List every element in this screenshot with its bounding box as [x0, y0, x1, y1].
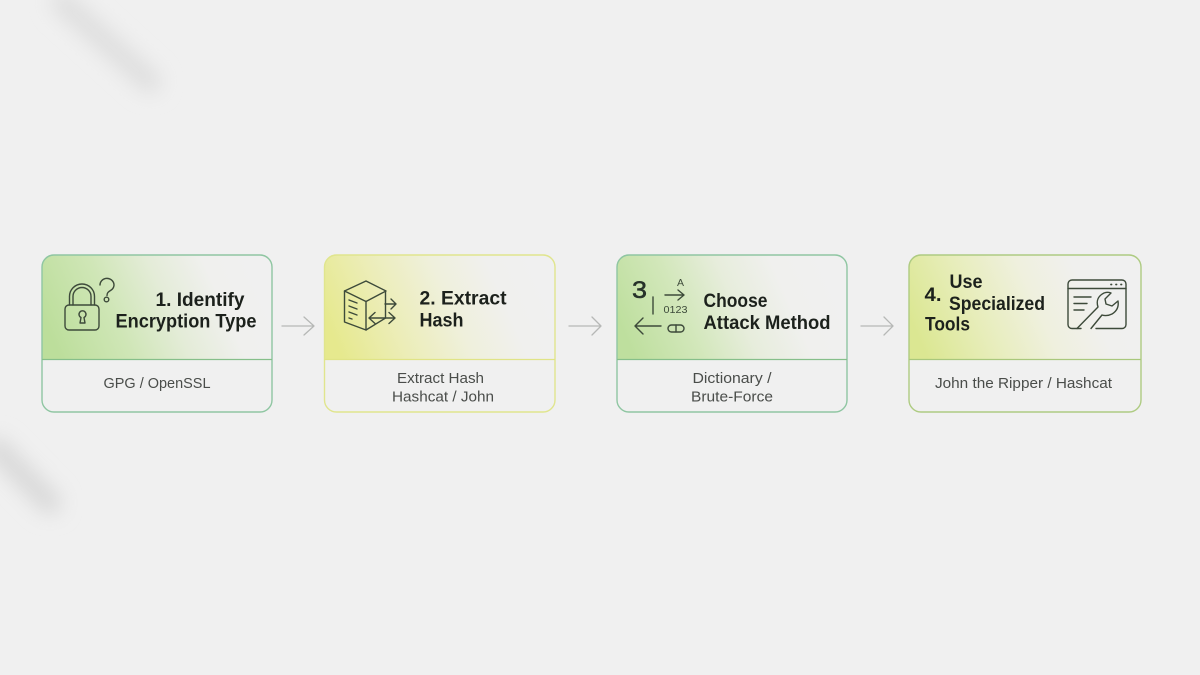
- icon: attack method symbols: 0123: [664, 304, 688, 316]
- heading: Use: [950, 272, 982, 293]
- heading: 4.: [924, 285, 942, 306]
- icon: cube with arrows: [344, 281, 396, 330]
- panel: step 2 extract hash: [324, 255, 555, 412]
- panel: step 1 identify encryption type: [42, 255, 272, 412]
- caption: [392, 371, 494, 406]
- caption: John the Ripper / Hashcat: [935, 376, 1112, 392]
- arrow 3 to 4: [861, 317, 893, 335]
- heading: Attack Method: [704, 313, 830, 334]
- caption: GPG / OpenSSL: [104, 376, 210, 392]
- heading: Tools: [925, 314, 970, 336]
- caption: Brute-Force: [691, 390, 773, 406]
- background streak: top left: [62, 2, 150, 82]
- caption: Hashcat / John: [392, 390, 494, 406]
- arrow 1 to 2: [282, 317, 314, 335]
- heading: [924, 272, 1045, 336]
- heading: [704, 291, 830, 334]
- heading: Choose: [704, 291, 768, 312]
- caption: Extract Hash: [397, 371, 484, 387]
- panel: step 4 use specialized tools: [909, 255, 1141, 412]
- heading: Hash: [420, 310, 464, 332]
- panel: step 3 choose attack method: [617, 255, 847, 412]
- heading: 2. Extract: [420, 288, 507, 310]
- heading: [420, 288, 507, 332]
- arrow 2 to 3: [569, 317, 601, 335]
- icon: attack method symbols: A: [677, 277, 684, 289]
- heading: [116, 290, 256, 332]
- icon: padlock with question mark: [65, 278, 114, 330]
- heading: 1. Identify: [156, 290, 245, 311]
- icon: browser window with wrench: [1068, 280, 1126, 328]
- heading: Specialized: [949, 294, 1045, 315]
- caption: Dictionary /: [692, 371, 773, 387]
- background streak: lower left: [0, 448, 50, 503]
- caption: [691, 371, 773, 406]
- heading: Encryption Type: [116, 312, 256, 332]
- icon: attack method symbols: [632, 277, 688, 334]
- icon: attack method symbols: 3: [632, 277, 647, 304]
